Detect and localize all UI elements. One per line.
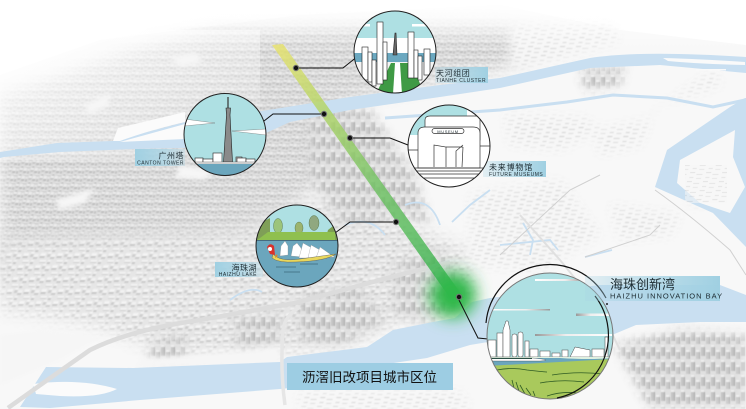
label: Canton Tower [135, 149, 185, 166]
label: Haizhu Innovation Bay: 海珠创新湾 [610, 277, 675, 292]
leader lines and dots [264, 56, 488, 339]
circle: Future Museum: MUSEUM [437, 129, 459, 134]
title box: 沥滘旧改项目城市区位 [302, 369, 437, 385]
east channel [655, 98, 746, 247]
small waterways [230, 190, 612, 300]
label: Haizhu Innovation Bay [585, 276, 723, 301]
label: Haizhu Lake: HAIZHU LAKE [219, 272, 257, 278]
label: Future Museums: FUTURE MUSEUMS [489, 172, 543, 178]
circle: Tianhe cluster [354, 10, 436, 94]
circle: Future Museum [407, 105, 491, 189]
label: Haizhu Lake [215, 262, 263, 278]
river branch [385, 95, 745, 118]
green glow at project site [430, 272, 476, 318]
lower river sandbank [33, 382, 117, 396]
circle: Canton Tower [184, 93, 266, 178]
upper river [0, 54, 746, 158]
label: Tianhe: 天河组团 [436, 68, 470, 78]
circle: Haizhu Innovation Bay [486, 265, 613, 400]
label: Future Museums [483, 161, 546, 178]
label: Haizhu Lake: 海珠湖 [232, 262, 257, 272]
label: Future Museums: 未来博物馆 [489, 162, 533, 172]
lower river [20, 285, 746, 408]
road network [8, 175, 746, 408]
river sandbar [113, 112, 185, 141]
label: Tianhe [435, 67, 488, 84]
east island [677, 130, 745, 213]
label: Canton Tower: CANTON TOWER [137, 160, 184, 166]
label: Canton Tower: 广州塔 [158, 150, 184, 160]
circle: Haizhu Lake [256, 205, 338, 289]
label: Tianhe: TIANHE CLUSTER [436, 78, 486, 84]
green axis band [272, 44, 476, 318]
title box [287, 363, 453, 390]
label: Haizhu Innovation Bay: HAIZHU INNOVATION BAY [610, 292, 723, 300]
black accent arcs [486, 265, 608, 398]
